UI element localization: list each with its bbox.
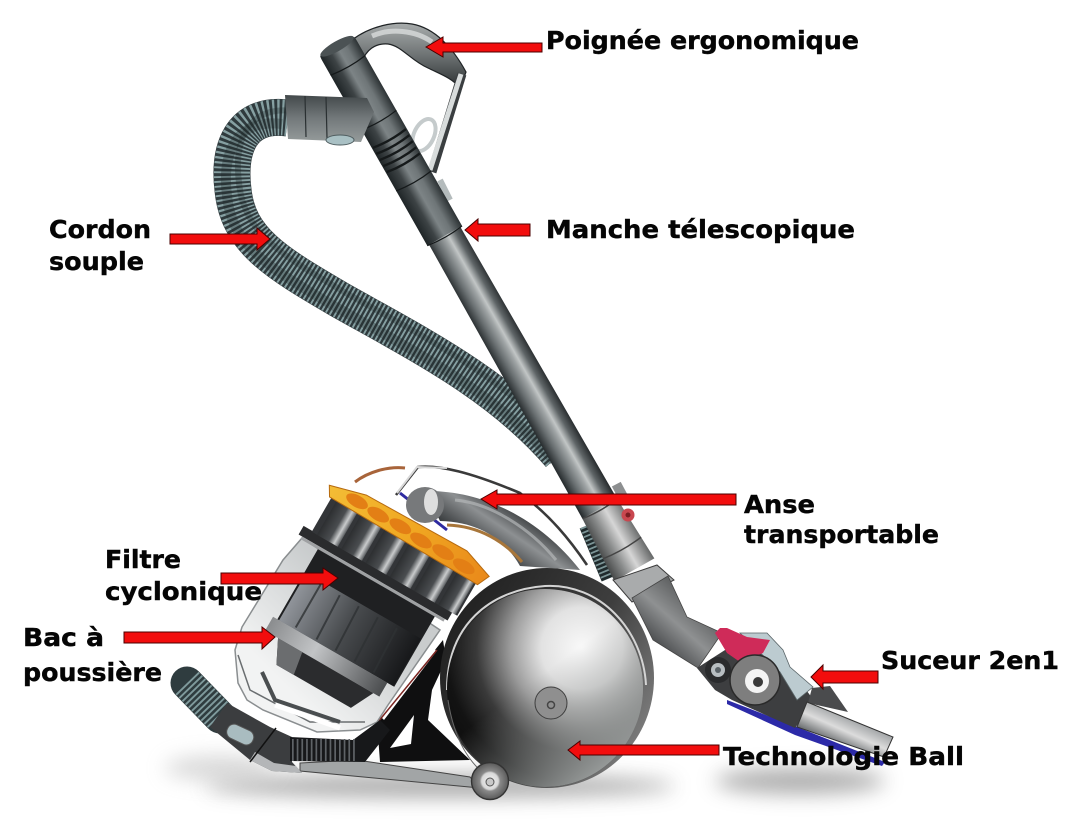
- tube to elbow ring: [613, 565, 674, 602]
- arrow: anse transportable: [481, 490, 736, 509]
- silver head: [797, 702, 893, 757]
- arrow: cordon souple: [170, 228, 270, 250]
- flexible hose: [226, 110, 610, 578]
- transparent dust bin shell: [235, 538, 440, 732]
- label: filtre cyclonique: cyclonique: [105, 577, 262, 606]
- base plate: [300, 760, 480, 788]
- arrow: manche télescopique: [465, 219, 530, 241]
- grey wand: [210, 703, 302, 773]
- arrow: bac à poussière: [124, 627, 275, 649]
- ring: [408, 115, 440, 155]
- dark wedge: [808, 686, 848, 712]
- floor nozzle: [697, 628, 893, 766]
- ball body: [440, 568, 654, 788]
- dark cylinder: [277, 548, 435, 687]
- ball cap: [535, 687, 567, 719]
- label: cordon souple: souple: [49, 247, 144, 276]
- orange cap: [323, 475, 495, 588]
- nozzle elbow: [632, 576, 722, 668]
- vacuum cleaner illustration: [187, 23, 893, 800]
- arrow: suceur 2en1: [811, 665, 878, 689]
- dark cone: [266, 638, 373, 714]
- label: poignée ergonomique: Poignée ergonomique: [546, 26, 859, 55]
- arrow: filtre cyclonique: [221, 568, 338, 590]
- corrugated end: [187, 683, 220, 717]
- label: manche télescopique: Manche télescopique: [546, 215, 855, 244]
- anse: carry arch: [425, 491, 580, 570]
- label: bac à poussière: poussière: [23, 658, 162, 687]
- black corrugated section: [290, 720, 390, 762]
- label: anse transportable: Anse: [744, 490, 815, 519]
- floor shadows: [165, 756, 885, 797]
- telescopic tube: [315, 31, 654, 581]
- light blue shield: [740, 633, 813, 700]
- fins: [312, 495, 478, 616]
- blue strip: [727, 700, 885, 766]
- label: bac à poussière: Bac à: [23, 623, 104, 652]
- black stand: [377, 640, 470, 762]
- label: technologie ball: Technologie Ball: [723, 742, 964, 771]
- arrow: poignée ergonomique: [426, 37, 542, 57]
- white gap in stand: [390, 715, 414, 748]
- ring: [299, 526, 453, 620]
- dark body: [697, 650, 815, 728]
- silver bar: [432, 74, 462, 172]
- small pivot: [705, 657, 731, 683]
- label: anse transportable: transportable: [744, 520, 939, 549]
- label: filtre cyclonique: Filtre: [105, 545, 181, 574]
- tube button: [612, 482, 634, 522]
- lower hose and wand: [187, 683, 390, 773]
- arrow: technologie ball: [568, 741, 719, 760]
- silver dome: [400, 487, 447, 530]
- label: cordon souple: Cordon: [49, 215, 151, 244]
- rear wheel: [472, 762, 508, 800]
- cyclone filter: [237, 474, 495, 735]
- wheel: [730, 655, 780, 705]
- carry handle wires: [355, 467, 587, 565]
- white gap beside bin: [376, 640, 436, 720]
- red mechanism: [715, 628, 770, 662]
- pleated filter: [279, 573, 421, 686]
- hose connector: [285, 95, 374, 145]
- silver band: [265, 617, 387, 697]
- label: suceur 2en1: Suceur 2en1: [881, 646, 1059, 675]
- ergonomic handle: [352, 23, 466, 200]
